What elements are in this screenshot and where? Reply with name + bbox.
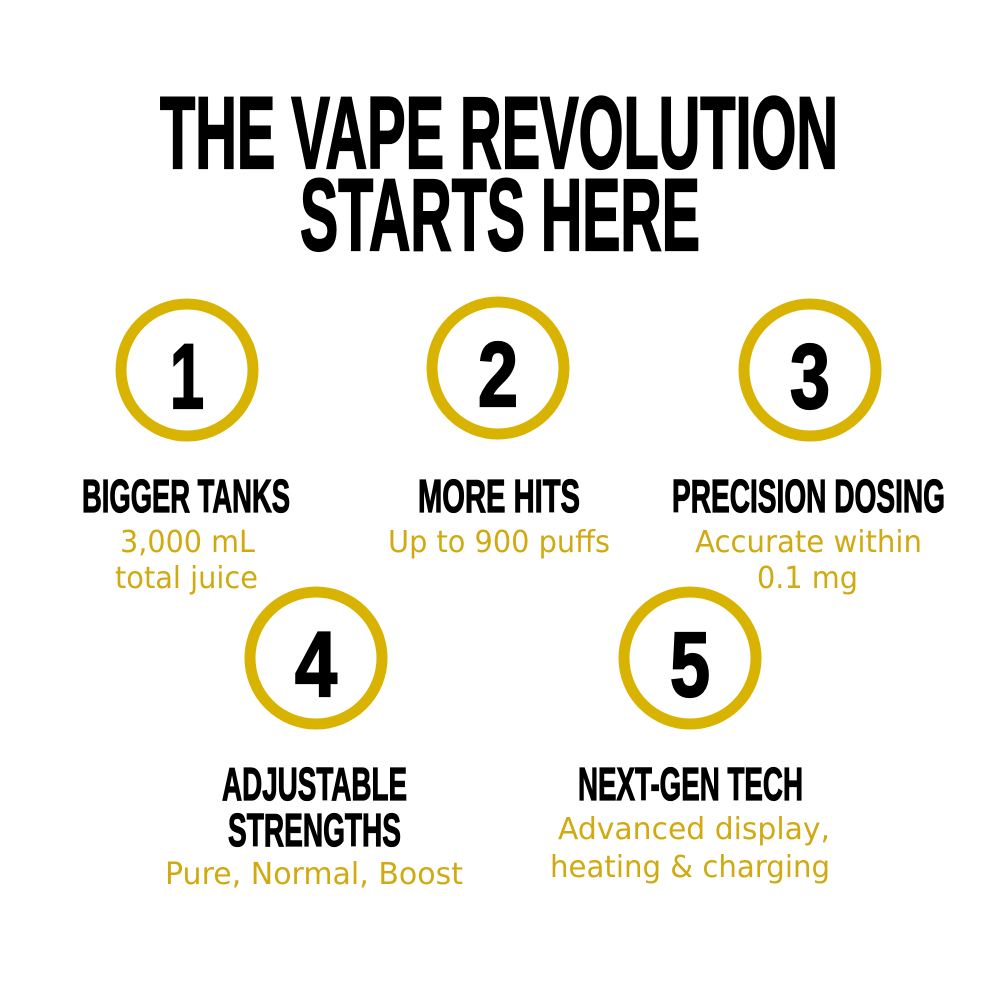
icon: number circle 5: 5 [670, 614, 710, 716]
title [160, 76, 838, 272]
text: accurate within 0.1 mg [695, 525, 922, 596]
heading: adjustable strengths: STRENGTHS [228, 804, 401, 856]
text: advanced display heating charging [550, 812, 830, 885]
icon: number circle 1: 1 [170, 326, 204, 428]
text: 3,000 mL total juice [115, 525, 258, 596]
text: 3,000 mL total juice: total juice [115, 561, 258, 596]
heading: next-gen tech: NEXT-GEN TECH [578, 758, 803, 810]
heading: adjustable strengths [222, 758, 407, 856]
text: up to 900 puffs: Up to 900 puffs [388, 525, 610, 560]
item 5: next-gen tech [550, 592, 830, 885]
icon: number circle 3 [744, 304, 876, 436]
heading: bigger tanks: BIGGER TANKS [82, 470, 290, 522]
icon: number circle 2 [432, 302, 564, 434]
item 2: more hits [388, 302, 610, 560]
text: accurate within 0.1 mg: Accurate within [695, 525, 922, 560]
icon: number circle 4 [250, 592, 382, 724]
icon: number circle 4: 4 [295, 614, 337, 716]
icon: number circle 5 [624, 592, 756, 724]
item 3: precision dosing [672, 304, 945, 596]
text: advanced display heating charging: heating & charging [550, 850, 830, 885]
text: pure normal boost: Pure, Normal, Boost [165, 857, 463, 892]
icon: number circle 1 [121, 304, 253, 436]
icon: number circle 3: 3 [790, 326, 830, 428]
heading: more hits: MORE HITS [418, 470, 580, 522]
text: advanced display heating charging: Advanced display, [558, 812, 830, 847]
title: STARTS HERE [300, 158, 700, 272]
text: 3,000 mL total juice: 3,000 mL [120, 525, 255, 560]
icon: number circle 2: 2 [478, 324, 518, 426]
text: accurate within 0.1 mg: 0.1 mg [757, 561, 858, 596]
item 1: bigger tanks [82, 304, 290, 596]
item 4: adjustable strengths [165, 592, 463, 892]
heading: adjustable strengths: ADJUSTABLE [222, 758, 407, 810]
